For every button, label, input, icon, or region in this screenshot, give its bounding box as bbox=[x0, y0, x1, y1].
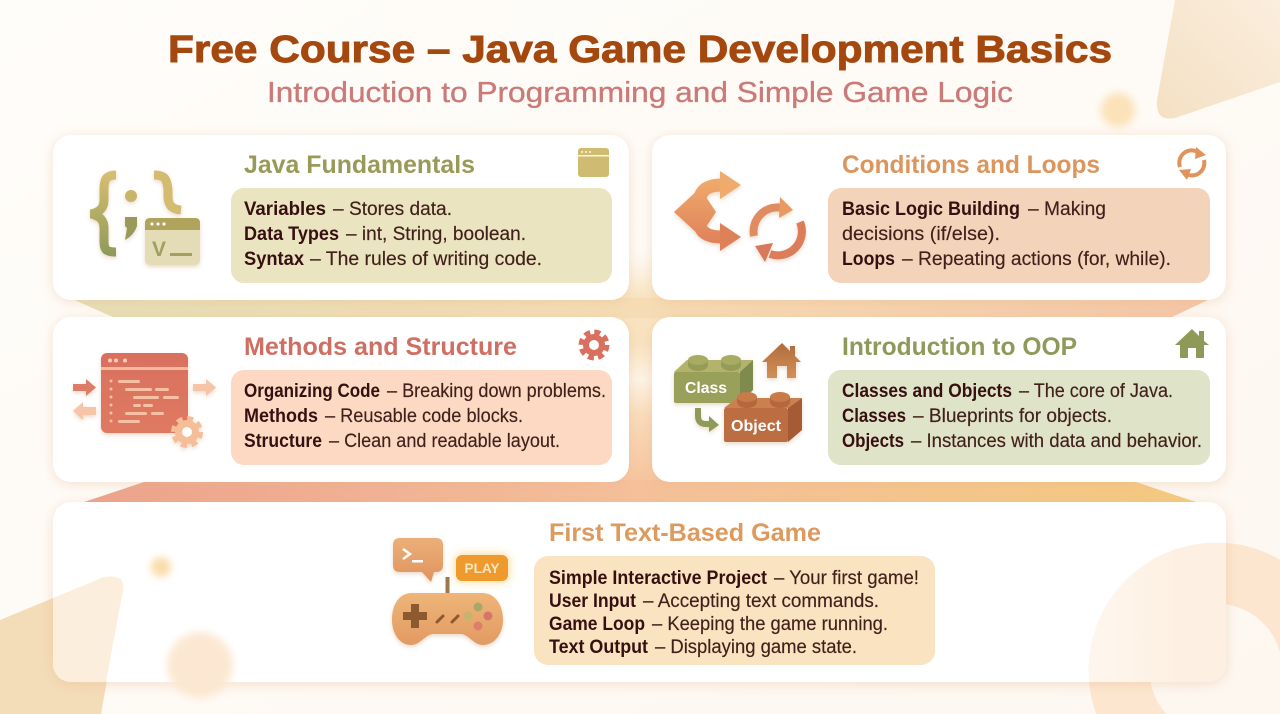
text box: – Displaying game state. bbox=[655, 637, 857, 658]
text box: – Keeping the game running. bbox=[652, 614, 888, 635]
text box: – int, String, boolean. bbox=[346, 224, 526, 245]
column gap strip bbox=[612, 250, 668, 485]
text box: – The rules of writing code. bbox=[310, 249, 542, 270]
icon: braces and terminal window bbox=[91, 175, 200, 265]
heading: Conditions and Loops bbox=[842, 151, 1100, 179]
text box: Game Loop bbox=[549, 614, 645, 635]
decorative triangle top right bbox=[1157, 0, 1280, 119]
text box bbox=[231, 188, 612, 283]
decorative glow circle top bbox=[1101, 93, 1135, 127]
icon: game controller with terminal bubble and play button: PLAY bbox=[464, 560, 500, 576]
text box: – Breaking down problems. bbox=[387, 381, 606, 402]
subtitle: Introduction to Programming and Simple Game Logic bbox=[267, 77, 1013, 109]
text box: Data Types bbox=[244, 224, 339, 245]
panel: Java Fundamentals bbox=[53, 135, 629, 300]
heading: Java Fundamentals bbox=[244, 151, 475, 179]
icon: class and object bricks with house: Object bbox=[731, 418, 782, 435]
text box: Organizing Code bbox=[244, 381, 380, 402]
heading: Introduction to OOP bbox=[842, 333, 1077, 361]
card background bbox=[53, 135, 629, 300]
panel: Conditions and Loops bbox=[652, 135, 1226, 300]
text box: Objects bbox=[842, 431, 904, 452]
panel: Methods and Structure bbox=[53, 317, 629, 482]
card background bbox=[652, 135, 1226, 300]
text box: Methods bbox=[244, 406, 318, 427]
icon: branching arrows and loop bbox=[674, 171, 802, 262]
title: Free Course – Java Game Development Basics bbox=[168, 29, 1112, 71]
icon: class and object bricks with house: Class bbox=[685, 380, 727, 397]
text box: – Stores data. bbox=[333, 199, 452, 220]
panel: Introduction to OOP bbox=[652, 317, 1226, 482]
panel: First Text-Based Game bbox=[53, 502, 1226, 698]
text box: Variables bbox=[244, 199, 326, 220]
text box bbox=[534, 556, 935, 665]
decorative shape bottom left bbox=[0, 577, 123, 714]
text box: Simple Interactive Project bbox=[549, 568, 768, 589]
decorative glow circle small bbox=[151, 557, 171, 577]
text box: – Accepting text commands. bbox=[643, 591, 879, 612]
text box: – Reusable code blocks. bbox=[325, 406, 523, 427]
text box: – Instances with data and behavior. bbox=[911, 431, 1202, 452]
text box: Syntax bbox=[244, 249, 304, 270]
icon: game controller with terminal bubble and play button bbox=[392, 538, 508, 645]
heading: Methods and Structure bbox=[244, 333, 517, 361]
card background bbox=[53, 502, 1226, 682]
text box: – The core of Java. bbox=[1019, 381, 1173, 402]
connector band upper bbox=[70, 298, 1212, 318]
icon: house small bbox=[1175, 329, 1209, 358]
text box bbox=[828, 370, 1210, 465]
icon: braces and terminal window: V bbox=[152, 238, 166, 261]
icon: class and object bricks with house bbox=[674, 343, 802, 442]
text box: decisions (if/else). bbox=[842, 224, 1000, 245]
text box: User Input bbox=[549, 591, 637, 612]
connector band lower bbox=[78, 480, 1202, 504]
text box: – Your first game! bbox=[774, 568, 919, 589]
text box bbox=[231, 370, 612, 465]
text box: Structure bbox=[244, 431, 322, 452]
text box: Text Output bbox=[549, 637, 649, 658]
heading: First Text-Based Game bbox=[549, 519, 821, 547]
card background bbox=[53, 317, 629, 482]
icon: sync small bbox=[1179, 147, 1206, 180]
decorative ring bottom right bbox=[1088, 542, 1280, 714]
text box: – Blueprints for objects. bbox=[913, 406, 1112, 427]
card decorative overlays bbox=[53, 543, 1226, 682]
text box bbox=[828, 188, 1210, 283]
text box: Classes and Objects bbox=[842, 381, 1012, 402]
icon: window small bbox=[578, 148, 609, 177]
text box: – Clean and readable layout. bbox=[329, 431, 560, 452]
decorative glow circle large bbox=[167, 632, 233, 698]
text box: – Repeating actions (for, while). bbox=[902, 249, 1171, 270]
icon: gear small bbox=[581, 332, 607, 358]
icon: code window with gear and arrows bbox=[73, 353, 216, 446]
text box: Classes bbox=[842, 406, 906, 427]
card background bbox=[652, 317, 1226, 482]
text box: Basic Logic Building bbox=[842, 199, 1020, 220]
text box: Loops bbox=[842, 249, 895, 270]
text box: – Making bbox=[1028, 199, 1106, 220]
